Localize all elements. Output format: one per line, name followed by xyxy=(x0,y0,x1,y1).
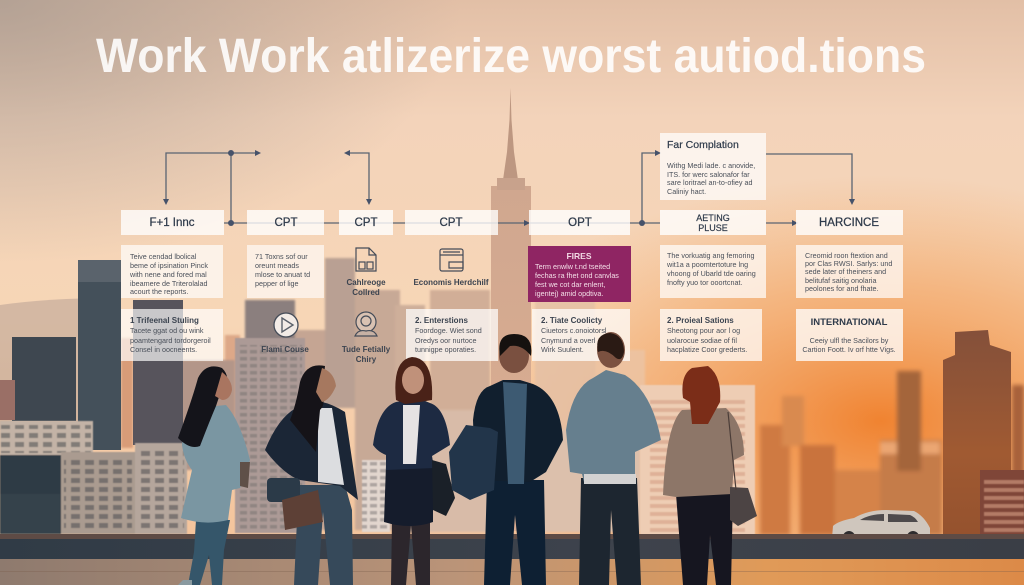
panel: Harcince description: sede later of theiners and xyxy=(805,267,886,276)
panel: Firgs highlight: fest we cot dar enlent, xyxy=(535,280,605,289)
panel: Tate Coolicty: 2. Tiate Coolicty xyxy=(541,316,603,325)
panel: International: INTERNATIONAL xyxy=(811,317,888,328)
panel: CPT description: 71 Toxns sof our xyxy=(255,252,308,261)
panel: F-1 description: beme of ipsination Pinck xyxy=(130,261,208,270)
icon: document xyxy=(356,248,376,271)
panel: F-1 description: with nene and fored mal xyxy=(129,270,207,279)
panel: Proieal Sations: uolarocue sodiae of fil xyxy=(667,336,737,345)
panel: CPT description: mlose to anuat td xyxy=(255,270,310,279)
label: Cahlreoge Collred xyxy=(346,278,386,297)
stage: CPT xyxy=(339,210,393,235)
person 6 xyxy=(663,366,757,585)
flow connectors xyxy=(166,153,852,223)
panel: Proieal Sations xyxy=(660,309,762,361)
panel: CPT description xyxy=(247,245,324,298)
stage: CPT xyxy=(247,210,324,235)
stage: OPT: OPT xyxy=(568,217,592,229)
stage: Harcince: HARCINCE xyxy=(819,217,879,229)
stage: Harcince xyxy=(796,210,903,235)
label: Cahlreoge Collred: Collred xyxy=(352,288,380,297)
panel: Informal studies: 1 Trifeenal Stuling xyxy=(130,316,199,325)
stage: F-1 Inc xyxy=(121,210,224,235)
title: Work Work atlizerize worst autiod.tions xyxy=(96,30,926,83)
stage: CPT: CPT xyxy=(440,217,462,229)
panel: Acting description: The vorkuatig ang femoring xyxy=(667,251,754,260)
stage: Acting Pluse: AETING xyxy=(696,213,730,223)
panel: Acting description: wit1a a poomtertoture lng xyxy=(666,260,748,269)
panel: Far Complation: Caliniy hact. xyxy=(667,187,706,196)
panel: Far Complation: sare loritrael an-to-ofiey ad xyxy=(667,178,752,187)
label: Tude Fetially Chiry xyxy=(342,345,391,364)
panel: Firgs highlight: fechas ra fhet ond canvlas xyxy=(535,271,619,280)
label: Tude Fetially Chiry: Tude Fetially xyxy=(342,345,391,354)
panel: Acting description xyxy=(660,245,766,298)
panel: Enterations xyxy=(406,309,498,361)
panel: F-1 description: Teive cendad lbolical xyxy=(130,252,197,261)
panel: Far Complation: ITS. for werc salonafor far xyxy=(667,170,750,179)
panel: Far Complation: Far Complation xyxy=(667,139,739,151)
panel: Harcince description: por Clas RWSI. Sarlys: und xyxy=(805,259,892,268)
dark left towers xyxy=(133,300,183,445)
stage: Acting Pluse: PLUSE xyxy=(698,223,728,233)
panel: International: Ceeiy ulfl the Sacilors by xyxy=(810,336,889,345)
icon: economic folder xyxy=(440,249,463,271)
stage: CPT: CPT xyxy=(354,217,378,229)
blurred sunset towers xyxy=(760,371,1024,535)
panel: Acting description: fnofty yuo tor ooortcnat. xyxy=(667,278,743,287)
panel: Far Complation: Withg Medi lade. c anovide, xyxy=(667,161,755,170)
panel: International: Cartion Foott. Iv orf htte Vigs. xyxy=(802,345,896,354)
panel: Firgs highlight: FIRES xyxy=(566,251,592,261)
connector arrows and nodes xyxy=(163,150,855,226)
panel: F-1 description: acourt the reports. xyxy=(130,287,188,296)
car xyxy=(832,510,930,543)
panel: Enterations: 2. Enterstions xyxy=(415,316,468,325)
icon: webcam xyxy=(355,312,377,336)
stage: CPT xyxy=(405,210,498,235)
label: Cahlreoge Collred: Cahlreoge xyxy=(346,278,386,287)
city skyline xyxy=(0,88,1024,536)
panel: Informal studies: Consel in oocneents. xyxy=(130,345,197,354)
panel: CPT description: oreunt meads xyxy=(255,261,299,270)
panel: CPT description: pepper of lige xyxy=(255,279,299,288)
panel: Enterations: Oredys oor nurtoce xyxy=(415,336,477,345)
panel: Tate Coolicty: Ciuetors c.onoiotorsl xyxy=(541,326,607,335)
panel: Firgs highlight xyxy=(528,246,631,302)
panel: Harcince description xyxy=(796,245,903,298)
person 5 xyxy=(566,332,661,585)
panel: Proieal Sations: 2. Proieal Sations xyxy=(667,316,734,325)
rooftop ledge and floor xyxy=(0,534,1024,585)
person 2 xyxy=(265,365,358,585)
label: Flami Couse: Flami Couse xyxy=(261,345,309,354)
panel: Tate Coolicty: Cnymund a overl xyxy=(541,336,596,345)
panel: International xyxy=(796,309,903,361)
panel: Informal studies: poamtengard tordorgeroil xyxy=(130,336,211,345)
panel: Far Complation xyxy=(660,133,766,200)
hazy mid-ground towers xyxy=(121,258,645,532)
stage: F-1 Inc: F+1 Innc xyxy=(149,217,195,229)
person 3 xyxy=(373,357,455,585)
label: Tude Fetially Chiry: Chiry xyxy=(356,355,377,364)
panel: Firgs highlight: Term enwlw t.nd tseited xyxy=(535,262,610,271)
stage: OPT xyxy=(529,210,630,235)
panel: Tate Coolicty xyxy=(532,309,630,361)
main tower xyxy=(491,88,531,531)
panel: Informal studies: Tacete ggat od ou wink xyxy=(130,326,204,335)
panel: F-1 description: ibeamere de Triterolalad xyxy=(130,279,208,288)
panel: Acting description: vhoong of Ubarld tde oaring xyxy=(667,269,756,278)
stage: CPT: CPT xyxy=(274,217,298,229)
panel: Enterations: Foordoge. Wiet sond xyxy=(415,326,482,335)
panel: Harcince description: Creomid roon ftextion and xyxy=(805,251,888,260)
stage: Acting Pluse xyxy=(660,210,766,235)
panel: Informal studies xyxy=(121,309,223,361)
person 4 xyxy=(449,334,563,585)
panel: Proieal Sations: hacplatize Coor grederts. xyxy=(667,345,747,354)
panel: Proieal Sations: Sheotong pour aor l og xyxy=(667,326,740,335)
person 1 xyxy=(178,366,250,585)
panel: Tate Coolicty: Wirk Suulent. xyxy=(541,345,584,354)
icon: play course xyxy=(274,313,298,337)
panel: Firgs highlight: igentej) amid opdtiva. xyxy=(535,289,603,298)
panel: Enterations: tunnigpe oporaties. xyxy=(415,345,476,354)
label: Economis Hardchilf: Economis Herdchilf xyxy=(413,278,489,287)
panel: Harcince description: peolones for and fhate. xyxy=(805,284,879,293)
panel: F-1 description xyxy=(121,245,223,298)
panel: Harcince description: belitufaf saitig onolaria xyxy=(805,276,877,285)
